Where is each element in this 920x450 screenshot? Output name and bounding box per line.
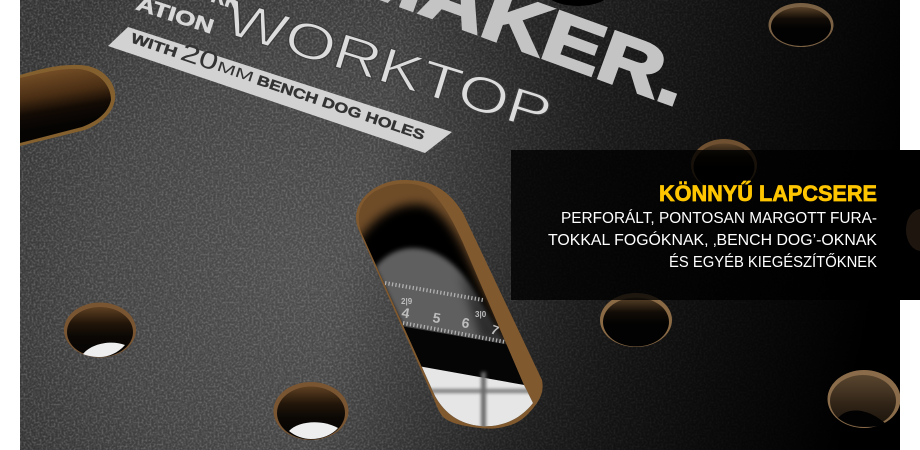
ruler digits: 3|0 bbox=[475, 310, 487, 319]
hole: round left with light crescent bbox=[64, 302, 136, 358]
ruler digits: 2|9 bbox=[401, 297, 413, 306]
hole: left slot bbox=[20, 65, 115, 146]
ruler ticks bbox=[385, 283, 505, 342]
caption heading: KÖNNYŰ LAPCSERE bbox=[659, 181, 877, 206]
printed label text: 20 bbox=[177, 38, 222, 77]
printed label text: MM bbox=[215, 58, 256, 85]
hole: at right edge under panel bbox=[906, 209, 920, 251]
printed label text: BENCH DOG HOLES bbox=[255, 72, 427, 143]
black square blade bbox=[400, 326, 530, 386]
caption body: PERFORÁLT, PONTOSAN MARGOTT FURA- bbox=[561, 208, 877, 227]
hole: round bottom with light crescent bbox=[274, 382, 348, 440]
slot rim bbox=[356, 180, 543, 429]
printed label text: WITH bbox=[129, 30, 180, 60]
caption body: ÉS EGYÉB KIEGÉSZÍTŐKNEK bbox=[669, 252, 877, 271]
ruler digits: 4 bbox=[400, 304, 411, 321]
ruler digits bbox=[401, 298, 500, 334]
hole: top edge bbox=[552, 0, 604, 6]
caption body bbox=[548, 208, 877, 271]
printed label bar bbox=[108, 27, 452, 153]
printed worktop lettering bbox=[108, 0, 699, 153]
hole: upper right bbox=[768, 3, 834, 47]
bright window reflection bbox=[422, 366, 533, 426]
caption body: TOKKAL FOGÓKNAK, ‚BENCH DOG’-OKNAK bbox=[548, 230, 877, 249]
hole: below caption panel bbox=[600, 293, 672, 347]
ruler surface bbox=[375, 248, 506, 345]
hole: lower right bbox=[828, 370, 900, 428]
printed label text bbox=[129, 30, 427, 143]
ruler digits: 7 bbox=[489, 322, 501, 338]
hole: behind caption panel bbox=[691, 139, 757, 191]
ruler digits: 6 bbox=[460, 314, 471, 331]
ruler digits: 5 bbox=[431, 309, 442, 326]
main slot with ruler visible through bbox=[356, 180, 543, 429]
slot interior bbox=[358, 184, 533, 426]
caption panel bbox=[511, 150, 920, 300]
